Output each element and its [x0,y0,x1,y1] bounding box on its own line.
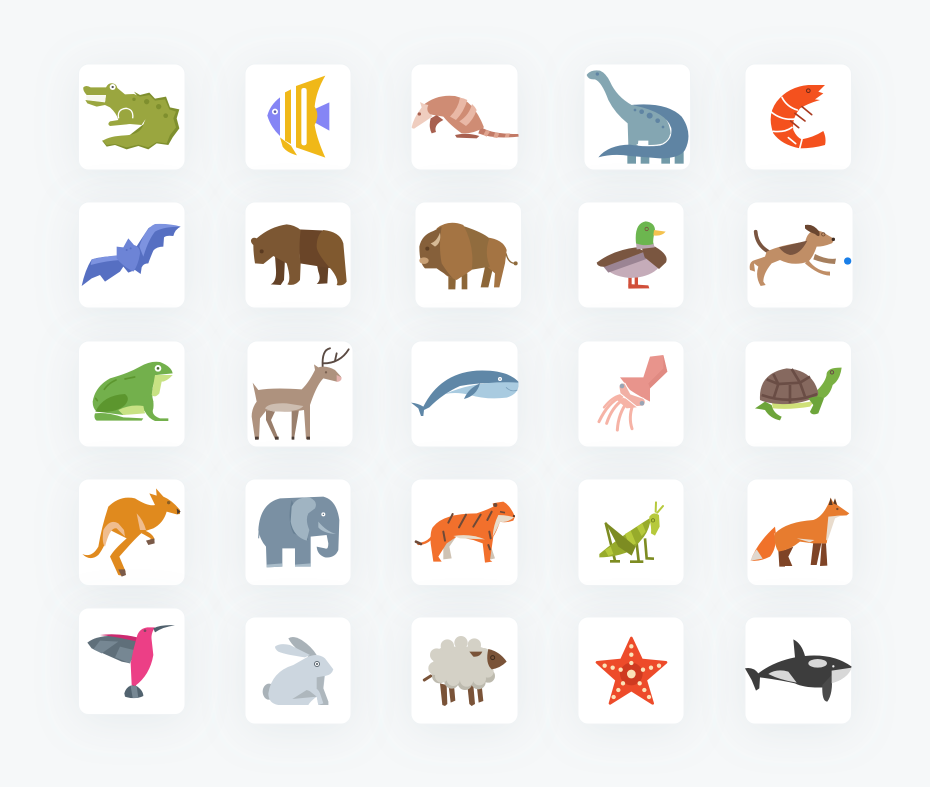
card: sheep [411,617,518,724]
card: elephant [245,479,351,586]
icon: fox [751,498,849,567]
card: duck [578,202,684,308]
card: whale [411,341,519,447]
icon: bear [251,224,347,285]
card: dog [747,202,853,308]
card: fox [747,479,853,586]
icon: turtle [755,368,842,420]
icon: kangaroo [82,488,181,577]
icon: dog [750,225,851,286]
icon: tiger [416,502,515,563]
icon: deer [252,348,349,440]
card: squid [578,341,684,447]
card: deer [247,341,353,447]
icon: orca [745,639,852,702]
card: shrimp [745,64,852,170]
icon: shrimp [771,85,826,149]
card: angelfish [245,64,351,170]
ball [844,257,851,265]
card: grasshopper [578,479,684,586]
card: armadillo [411,64,519,170]
icon: hummingbird [87,625,175,698]
icon: bat [82,224,181,286]
card: tiger [411,479,518,586]
icon: bison [419,223,518,289]
card: bat [78,202,185,308]
icon: armadillo [412,96,519,138]
card: orca [745,617,852,724]
icon: whale [411,371,519,416]
card: bison [415,202,522,308]
icon: rabbit [263,637,333,705]
icon: sheep [424,636,507,706]
card: kangaroo [78,479,185,586]
icon: angelfish [267,76,329,158]
card: rabbit [245,617,351,724]
icon: starfish [597,638,666,703]
icon: squid [599,355,667,430]
card: hummingbird [78,608,185,714]
card: dinosaur [584,64,690,170]
icon: grasshopper [599,502,663,562]
card: bear [245,202,351,308]
icon: frog [93,362,173,421]
icon: crocodile [83,83,179,149]
card: starfish [578,617,684,724]
icon: dinosaur [587,70,688,164]
card: frog [78,341,185,447]
icon: elephant [258,497,339,567]
card: crocodile [78,64,185,170]
icon: duck [597,221,667,289]
card: turtle [745,341,852,447]
